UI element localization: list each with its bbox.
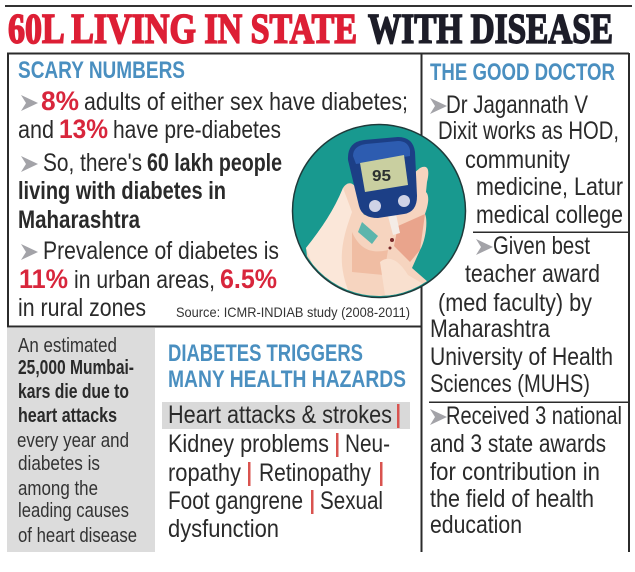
bullet: prevalence: 11% (19, 264, 68, 294)
hazards list: dysfunction (168, 515, 279, 543)
heading: health hazards: DIABETES TRIGGERS (168, 340, 363, 367)
bullet: 8 percent adults: and (18, 116, 54, 144)
bullet: doctor role (430, 91, 623, 229)
title: 60L LIVING IN STATE (8, 7, 357, 53)
bullet: 60 lakh people: living with diabetes in (18, 177, 226, 205)
bullet: prevalence: 6.5% (220, 264, 277, 294)
hazards list: Retinopathy (259, 459, 371, 487)
highlight bar (162, 402, 410, 429)
bullet: national and state awards (430, 402, 622, 539)
panel: heart disease note: heart attacks (18, 404, 117, 427)
bullet: doctor role: Dr Jagannath V (446, 91, 588, 119)
bullet: 60 lakh people: Maharashtra (18, 206, 141, 234)
bullet: doctor role: community (465, 146, 570, 174)
bullet: 60 lakh people (18, 149, 282, 234)
hazards list: Neu- (345, 430, 390, 458)
test strip (388, 214, 400, 235)
bullet: best teacher award: (med faculty) by (438, 289, 592, 317)
panel: heart disease note (7, 328, 155, 552)
heading: health hazards: MANY HEALTH HAZARDS (168, 366, 406, 393)
hazards list: Foot gangrene (168, 487, 303, 515)
bullet: national and state awards: and 3 state awards (430, 430, 606, 458)
panel: heart disease note: diabetes is (18, 452, 100, 475)
meter body (348, 137, 417, 218)
bullet: prevalence: Prevalence of diabetes is (43, 237, 279, 265)
bullet: 60 lakh people: So, there's (43, 149, 142, 177)
panel: heart disease note: among the (18, 477, 98, 500)
bullet: 8 percent adults: adults of either sex have diabetes; (84, 88, 408, 116)
bullet: 60 lakh people: 60 lakh people (147, 149, 282, 177)
icon: glucose meter photo: 95 (372, 168, 391, 185)
panel: heart disease note: An estimated (18, 334, 117, 357)
bullet: prevalence: in rural zones (18, 294, 146, 322)
hazards list: ropathy (168, 459, 241, 487)
bullet: prevalence: in urban areas, (74, 266, 215, 294)
bullet: best teacher award: Sciences (MUHS) (430, 370, 590, 398)
panel: heart disease note: leading causes (18, 499, 129, 522)
panel: heart disease note: kars die due to (18, 380, 129, 403)
hand (306, 167, 428, 305)
bullet: best teacher award (430, 232, 613, 398)
bullet: 8 percent adults: 8% (41, 86, 79, 116)
icon: glucose meter photo (292, 124, 466, 305)
bullet: 8 percent adults (18, 86, 408, 144)
panel: scary numbers (18, 57, 410, 322)
meter buttons (369, 200, 381, 212)
panel: health hazards (162, 340, 410, 543)
bullet: best teacher award: Given best (493, 232, 590, 260)
panel: heart disease note: of heart disease (18, 524, 137, 547)
hazards list: Heart attacks & strokes (168, 401, 392, 429)
source note: Source: ICMR-INDIAB study (2008-2011) (176, 304, 410, 320)
bullet: best teacher award: teacher award (465, 260, 600, 288)
bullet: prevalence (18, 237, 279, 322)
bullet: national and state awards: the field of health (430, 485, 594, 513)
panel: heart disease note: 25,000 Mumbai- (18, 356, 134, 379)
bullet: national and state awards: for contribution in (430, 458, 600, 486)
hazards list: Sexual (320, 487, 383, 515)
hazards list: Kidney problems (168, 430, 329, 458)
meter screen (360, 155, 408, 192)
heading: health hazards (168, 340, 406, 393)
panel: the good doctor (430, 59, 623, 539)
heading: scary numbers: SCARY NUMBERS (18, 57, 185, 84)
hazards list (168, 401, 400, 543)
bullet: 8 percent adults: have pre-diabetes (113, 116, 281, 144)
bullet: national and state awards: education (430, 511, 522, 539)
bullet: 8 percent adults: 13% (59, 114, 108, 144)
bullet: best teacher award: Maharashtra (430, 315, 550, 343)
panel: heart disease note: every year and (17, 429, 129, 452)
